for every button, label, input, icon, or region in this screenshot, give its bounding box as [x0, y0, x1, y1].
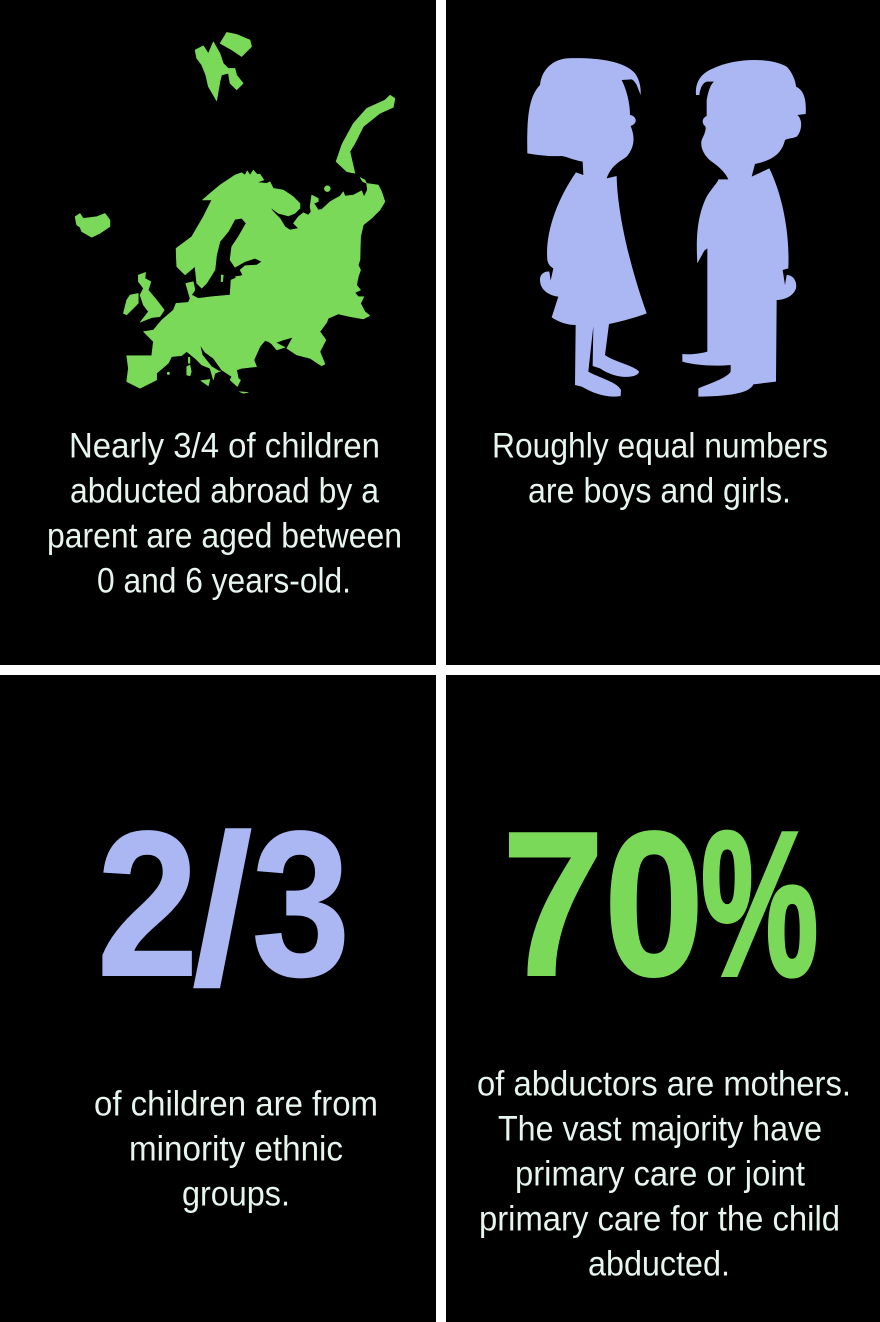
big number: 2/3: 3 [252, 789, 350, 1019]
caption: minority ethnic groups: groups. [182, 1175, 290, 1214]
caption: age of children: parent are aged between [47, 517, 402, 556]
caption: abductors are mothers [477, 1065, 851, 1284]
caption: boys and girls: Roughly equal numbers [492, 427, 828, 466]
caption: abductors are mothers: abducted. [588, 1245, 730, 1284]
caption: minority ethnic groups: of children are from [94, 1085, 378, 1124]
big number: 70%: 0 [604, 789, 704, 1019]
caption: abductors are mothers: primary care or joint [515, 1155, 805, 1194]
caption: age of children [47, 427, 402, 601]
caption: age of children: abducted abroad by a [70, 472, 379, 511]
caption: abductors are mothers: The vast majority have [498, 1110, 822, 1149]
panel: top left [0, 0, 436, 665]
caption: boys and girls [492, 427, 828, 511]
big number: 2/3: 2 [97, 790, 198, 1020]
caption: age of children: 0 and 6 years-old. [97, 562, 351, 601]
big number: 70% [502, 788, 818, 1019]
big number: 70%: 7 [502, 789, 604, 1019]
caption: abductors are mothers: primary care for the child [479, 1200, 840, 1239]
caption: minority ethnic groups [94, 1085, 378, 1214]
icon: girl and boy silhouettes [527, 58, 806, 397]
caption: abductors are mothers: of abductors are mothers. [477, 1065, 851, 1104]
caption: minority ethnic groups: minority ethnic [129, 1130, 343, 1169]
big number: 2/3 [97, 789, 350, 1030]
big number: 70%: % [701, 788, 818, 1019]
panel: bottom left [0, 675, 436, 1322]
caption: boys and girls: are boys and girls. [528, 472, 791, 511]
panel: top right [446, 0, 880, 665]
panel: bottom right [446, 675, 880, 1322]
map of Europe [75, 32, 395, 393]
caption: age of children: Nearly 3/4 of children [69, 427, 380, 466]
big number: 2/3: / [191, 789, 254, 1030]
